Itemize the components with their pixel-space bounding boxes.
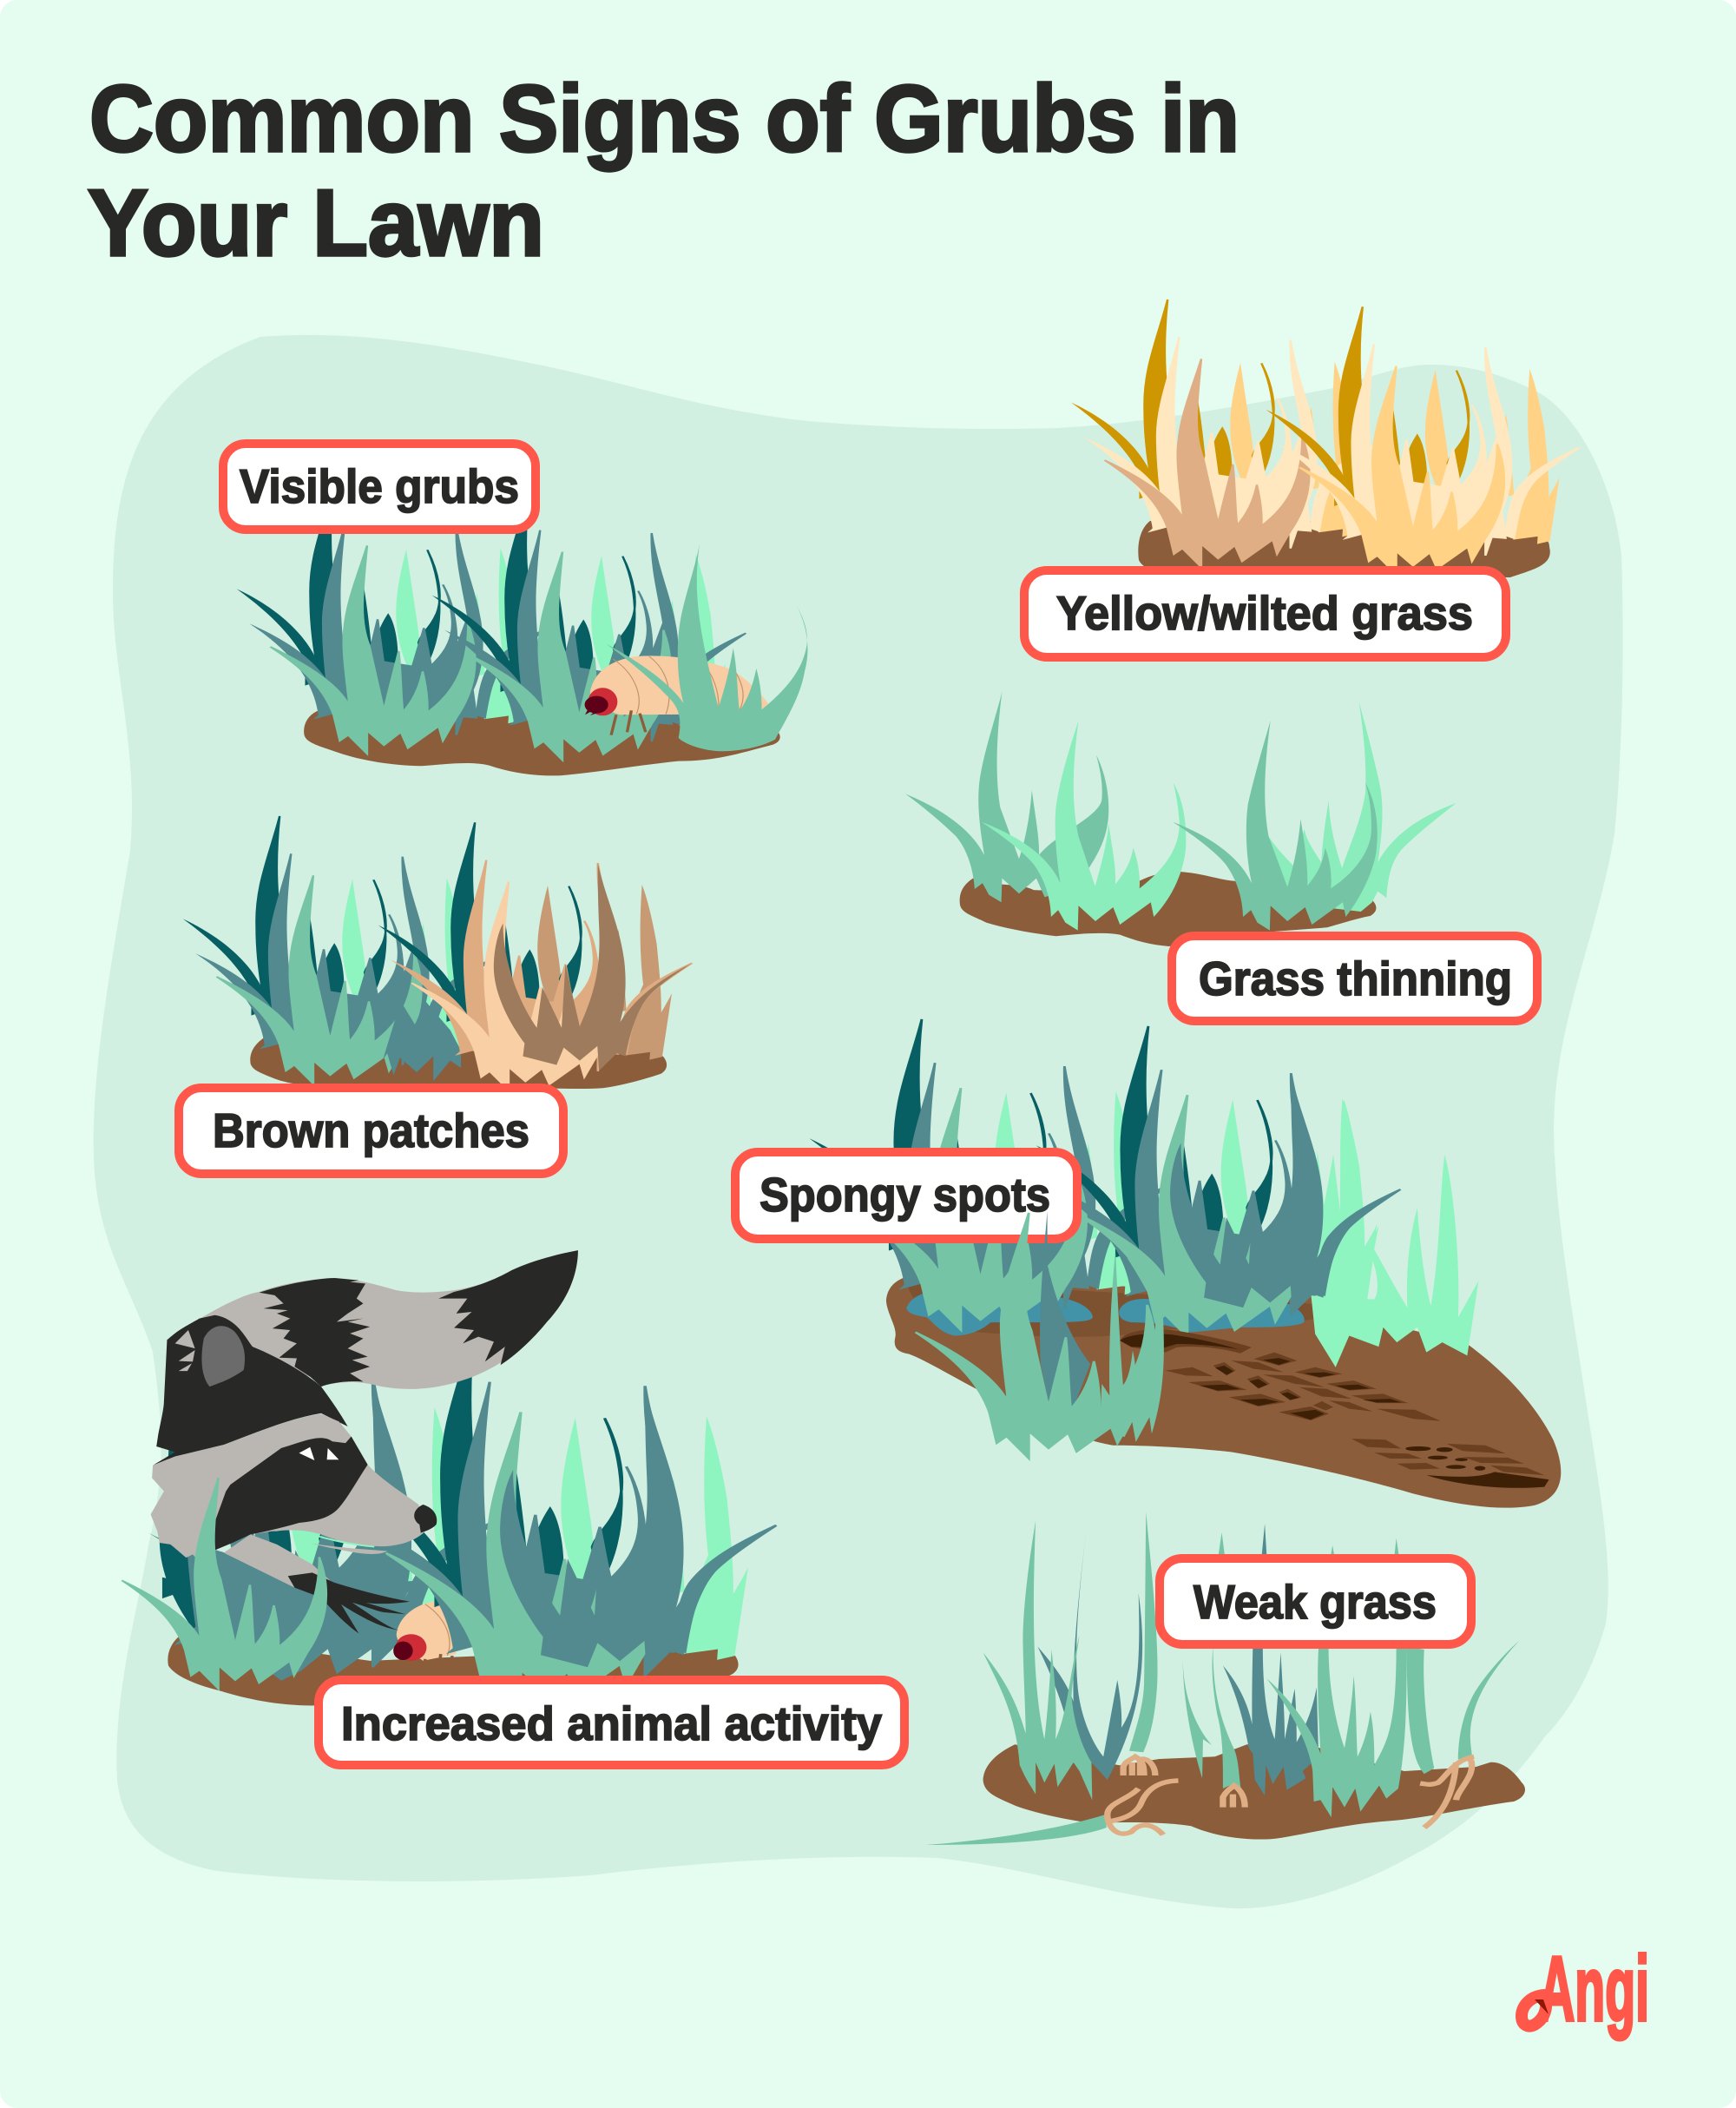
label: Spongy spots xyxy=(735,1152,1077,1239)
paw xyxy=(288,1572,410,1633)
raccoon xyxy=(151,1250,578,1633)
tail xyxy=(166,1250,578,1389)
tall blade tips above label xyxy=(1218,1532,1399,1557)
scene: grass thinning xyxy=(905,692,1457,946)
ear xyxy=(201,1326,245,1387)
front tuft xyxy=(89,1418,402,1689)
soil xyxy=(886,1277,1561,1508)
label: Visible grubs xyxy=(223,444,536,530)
background blob xyxy=(94,335,1623,1908)
label: Yellow/wilted grass xyxy=(1024,570,1506,657)
tuft right xyxy=(432,492,746,761)
mask xyxy=(213,1436,368,1551)
center thin blades xyxy=(1183,1647,1241,1789)
right big tuft xyxy=(1266,1647,1407,1817)
eye xyxy=(299,1447,339,1460)
nose xyxy=(414,1505,437,1532)
label: Increased animal activity xyxy=(319,1680,904,1765)
grub xyxy=(393,1601,457,1674)
label: Yellow/wilted grass: Yellow/wilted grass xyxy=(1056,586,1473,640)
front tuft xyxy=(876,1143,1244,1459)
back tuft xyxy=(67,1321,504,1694)
center mid tuft xyxy=(1223,1647,1318,1795)
label: Weak grass xyxy=(1160,1558,1471,1644)
label: Grass thinning xyxy=(1172,936,1537,1021)
soil xyxy=(983,1744,1525,1840)
tuft: wilted right xyxy=(1266,306,1580,575)
tuft: brown xyxy=(378,822,692,1090)
mint tuft xyxy=(1311,1100,1478,1367)
tuft: green left xyxy=(905,692,1108,902)
tuft: green xyxy=(183,816,496,1084)
tuft: green right xyxy=(1173,721,1378,931)
fallen blade xyxy=(926,1815,1107,1845)
label: Weak grass: Weak grass xyxy=(1194,1575,1437,1629)
grub xyxy=(585,655,771,735)
soil xyxy=(1138,521,1550,580)
front blade tuft xyxy=(606,544,807,751)
puddles xyxy=(906,1291,1305,1335)
label: Spongy spots: Spongy spots xyxy=(760,1168,1050,1222)
title: Common Signs of Grubs in xyxy=(89,66,1240,172)
back tuft left edge xyxy=(148,1532,240,1644)
label: Increased animal activity: Increased animal activity xyxy=(341,1696,882,1750)
front tuft mid blade xyxy=(1040,1211,1090,1411)
soil hole shadows xyxy=(1200,1358,1549,1488)
scene: yellow/wilted grass xyxy=(1071,300,1580,580)
title: Your Lawn xyxy=(88,170,544,276)
right side blade xyxy=(1407,1647,1434,1774)
head fur notches xyxy=(175,1330,195,1371)
title xyxy=(88,66,1240,276)
scene: spongy spots xyxy=(809,1019,1561,1508)
soil xyxy=(960,872,1376,946)
tall blade tip xyxy=(1261,1524,1266,1557)
tuft: mint back right xyxy=(1269,702,1457,912)
label: Visible grubs: Visible grubs xyxy=(240,459,519,513)
spongy front grass xyxy=(876,1143,1244,1459)
logo: Angi xyxy=(1522,1938,1649,2040)
face fur xyxy=(151,1413,425,1559)
front tuft right blades xyxy=(1100,1251,1164,1447)
soil xyxy=(250,1038,667,1089)
soil holes xyxy=(1166,1353,1544,1475)
head top xyxy=(153,1315,348,1466)
label: Brown patches: Brown patches xyxy=(213,1103,529,1157)
scene: brown patches xyxy=(183,816,692,1090)
scene: visible grubs xyxy=(237,486,807,775)
main tuft xyxy=(339,1329,776,1703)
tail band xyxy=(260,1278,370,1387)
foreleg xyxy=(224,1534,334,1588)
soil xyxy=(304,710,780,775)
jaw xyxy=(310,1543,388,1554)
label: Grass thinning: Grass thinning xyxy=(1199,952,1512,1005)
tuft left xyxy=(237,486,550,754)
scene: weak grass xyxy=(926,1512,1525,1845)
left tuft light xyxy=(983,1521,1092,1800)
left tuft mid xyxy=(1037,1513,1142,1780)
mouth xyxy=(302,1532,374,1547)
label: Brown patches xyxy=(179,1088,563,1174)
burrow tunnel shadow xyxy=(1120,1334,1238,1349)
burrow tunnel xyxy=(1120,1329,1252,1354)
tuft right xyxy=(1036,1026,1400,1337)
soil rim xyxy=(906,1281,1322,1337)
tuft: mint center xyxy=(982,721,1186,931)
tall blade xyxy=(1129,1512,1158,1752)
tuft: wilted left xyxy=(1071,300,1384,567)
back tuft base xyxy=(195,1554,414,1681)
teal base xyxy=(383,1001,461,1081)
soil xyxy=(168,1634,739,1705)
scene: increased animal activity xyxy=(67,1250,776,1705)
tail tip xyxy=(438,1250,578,1365)
roots and worms xyxy=(1108,1756,1474,1835)
tuft left xyxy=(809,1019,1174,1330)
far right blade xyxy=(1458,1641,1519,1760)
